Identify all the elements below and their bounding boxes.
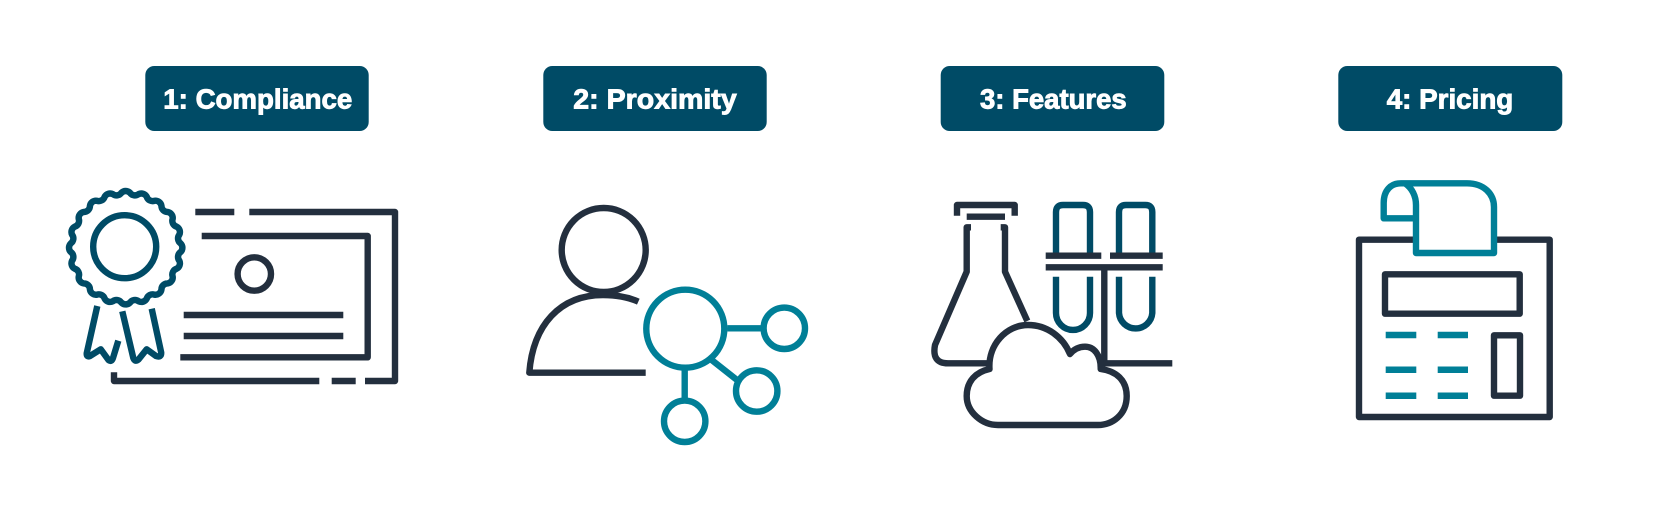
icon: calculator xyxy=(1359,183,1550,417)
heading: 4: Pricing: 4: Pricing xyxy=(1387,83,1513,114)
ribbons xyxy=(87,306,161,361)
icon: person xyxy=(529,208,646,373)
icon: certificate with rosette xyxy=(69,191,395,381)
heading: 3: Features: 3: Features xyxy=(980,83,1127,114)
panel: pricing xyxy=(1338,66,1562,417)
icon: rack xyxy=(1046,256,1172,363)
paper receipt xyxy=(1384,183,1494,253)
heading: 1: Compliance xyxy=(145,66,369,131)
calculator body xyxy=(1359,240,1550,417)
panel: compliance xyxy=(69,66,395,381)
icon: connected nodes xyxy=(646,290,805,442)
icon: test tubes xyxy=(1056,205,1152,330)
keys xyxy=(1386,335,1468,396)
panel: proximity xyxy=(529,66,805,442)
icon: flask xyxy=(934,205,1027,363)
heading: 2: Proximity: 2: Proximity xyxy=(573,83,737,114)
certificate frame xyxy=(114,212,395,381)
heading: 1: Compliance: 1: Compliance xyxy=(163,83,352,114)
panel: features xyxy=(934,66,1172,425)
heading: 3: Features xyxy=(941,66,1164,131)
heading: 2: Proximity xyxy=(543,66,767,131)
icon: cloud xyxy=(967,325,1127,425)
heading: 4: Pricing xyxy=(1338,66,1562,131)
rosette xyxy=(69,191,182,304)
